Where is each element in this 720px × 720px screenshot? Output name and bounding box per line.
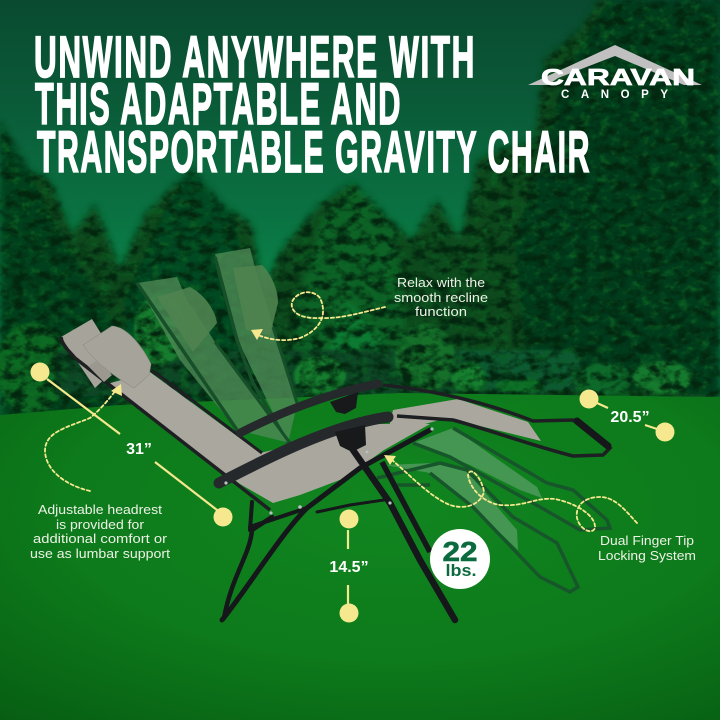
- callout: headrest: additional comfort or: [33, 531, 168, 546]
- ghost leg rest, upper: [413, 428, 610, 530]
- ghost backrest, upright: [215, 248, 297, 443]
- arrowhead: [384, 455, 396, 465]
- headrest pillow: [83, 326, 151, 388]
- ghost leg rest, lower: [377, 463, 578, 592]
- logo: Caravan Canopy: [528, 45, 702, 101]
- far arm rest: [240, 384, 378, 433]
- callout: locking system: Dual Finger Tip: [600, 533, 694, 548]
- callout: locking system: [384, 455, 696, 563]
- foot grip: [577, 421, 608, 446]
- logo roof: [528, 45, 702, 85]
- dimension: 31 inch: 31”: [126, 441, 152, 458]
- dimension: 14.5 inch: 14.5”: [329, 559, 369, 576]
- front long leg: [353, 450, 455, 620]
- pivot bracket: [335, 425, 366, 452]
- far side rail and leg rest fabric: [383, 385, 609, 445]
- front curved legs: [222, 430, 430, 620]
- dimension: 31 inch: [30, 362, 232, 526]
- callout: headrest: use as lumbar support: [30, 546, 170, 561]
- weight badge: 22 lbs: [430, 529, 490, 589]
- weight badge: 22 lbs: lbs.: [446, 561, 476, 580]
- back frame rails: [61, 337, 270, 510]
- dimension: 14.5 inch: [329, 510, 369, 622]
- back and seat fabric: [107, 372, 430, 503]
- bolts: [224, 427, 434, 515]
- title: [34, 25, 591, 185]
- logo: Caravan Canopy: CANOPY: [561, 89, 668, 101]
- near arm rest: [219, 417, 388, 483]
- headrest strap: [88, 361, 112, 382]
- callout: recline: function: [415, 304, 467, 319]
- callout: recline: smooth recline: [394, 290, 488, 305]
- callout: locking system: Locking System: [598, 548, 696, 563]
- far pivot bracket: [330, 392, 358, 414]
- far leg: [382, 462, 430, 552]
- near rail to hand grip: [397, 416, 610, 456]
- logo: Caravan Canopy: CARAVAN: [541, 64, 695, 90]
- callout: recline: Relax with the: [397, 275, 485, 290]
- arrowhead: [251, 329, 263, 340]
- dimension: 20.5 inch: [580, 390, 674, 442]
- arrowhead: [111, 384, 122, 396]
- ghost recline positions of the chair: [137, 248, 610, 592]
- chair, main position: [61, 319, 610, 620]
- dimension: 20.5 inch: 20.5”: [610, 409, 650, 426]
- callout: recline: [251, 275, 488, 340]
- ghost backrest, middle: [137, 277, 290, 443]
- headrest top fabric: [61, 319, 112, 388]
- callout: headrest: Adjustable headrest: [38, 502, 162, 517]
- weight badge: 22 lbs: 22: [442, 536, 478, 567]
- callout: headrest: is provided for: [56, 517, 145, 532]
- callout: headrest: [30, 384, 170, 561]
- title: THIS ADAPTABLE AND: [35, 72, 402, 137]
